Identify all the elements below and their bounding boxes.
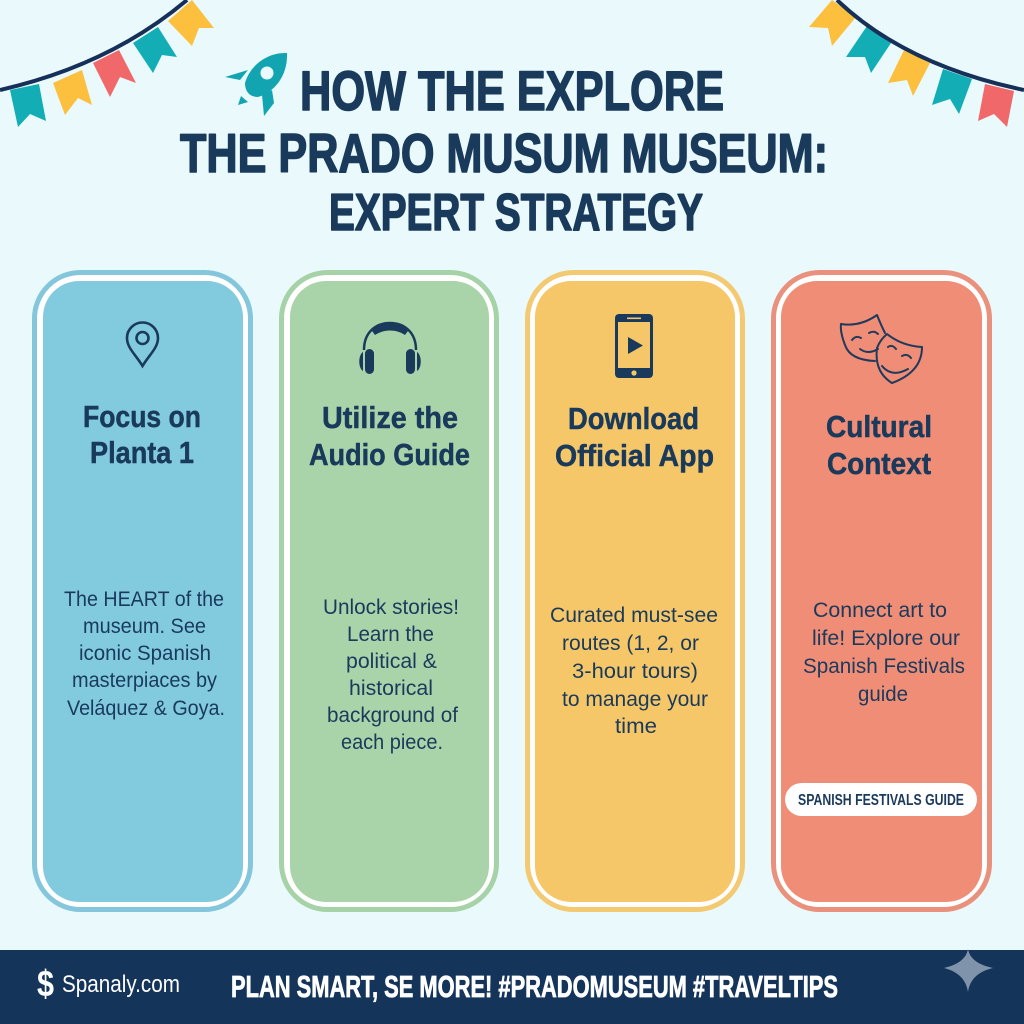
body text: routes (1, 2, or <box>562 632 699 655</box>
heading <box>309 400 470 472</box>
title: THE PRADO MUSUM MUSEUM: <box>180 122 828 184</box>
body text: museum. See <box>83 615 206 638</box>
body text: political & <box>346 650 437 673</box>
heading: Download <box>568 401 699 436</box>
body text: historical <box>349 677 433 700</box>
icon: map pin <box>127 322 158 366</box>
icon: rocket <box>225 53 287 116</box>
body text: The HEART of the <box>64 588 224 611</box>
panel: Cultural Context <box>774 272 990 910</box>
button: Spanish Festivals Guide <box>785 783 977 816</box>
title: HOW THE EXPLORE <box>300 59 724 122</box>
body text: life! Explore our <box>812 627 960 650</box>
body text <box>803 599 965 706</box>
heading <box>83 399 201 470</box>
heading <box>826 409 932 481</box>
body text: Unlock stories! <box>323 596 459 619</box>
title <box>180 59 828 242</box>
heading: Cultural <box>826 409 932 444</box>
body text: Veláquez & Goya. <box>67 697 225 720</box>
body text <box>550 604 718 738</box>
heading: Official App <box>555 438 714 473</box>
body text: guide <box>858 683 908 706</box>
title: EXPERT STRATEGY <box>329 184 703 242</box>
body text: Spanish Festivals <box>803 655 965 678</box>
body text: background of <box>327 704 458 727</box>
body text: to manage your <box>562 688 708 711</box>
brand logo: $ <box>37 963 54 1004</box>
panel: Focus on Planta 1 <box>34 272 250 910</box>
button: Spanish Festivals Guide: SPANISH FESTIVALS GUIDE <box>798 792 964 809</box>
body text <box>323 596 459 754</box>
heading: Context <box>827 446 931 481</box>
heading <box>555 401 714 473</box>
body text: each piece. <box>341 731 443 754</box>
body text: Connect art to <box>813 599 947 622</box>
body text: Curated must-see <box>550 604 718 627</box>
bunting: top left <box>0 0 214 127</box>
body text: time <box>615 715 657 738</box>
heading: Focus on <box>83 399 201 434</box>
body text: Learn the <box>347 623 434 646</box>
icon: headphones <box>359 323 421 374</box>
footer banner <box>0 949 1024 1024</box>
heading: Planta 1 <box>90 435 194 470</box>
body text: 3-hour tours) <box>572 660 698 683</box>
body text: masterpiaces by <box>72 669 217 692</box>
panel: Download Official App <box>528 272 742 910</box>
brand logo <box>37 963 180 1004</box>
body text <box>64 588 225 720</box>
heading: Utilize the <box>322 400 458 435</box>
panel: Utilize the Audio Guide <box>282 272 496 910</box>
brand logo: Spanaly.com <box>62 971 180 998</box>
heading: Audio Guide <box>309 437 470 472</box>
icon: theatre masks <box>841 315 922 383</box>
body text: iconic Spanish <box>79 642 211 665</box>
icon: phone with play button <box>615 314 653 378</box>
bunting: top right <box>809 0 1024 127</box>
icon: sparkle star <box>944 949 993 992</box>
